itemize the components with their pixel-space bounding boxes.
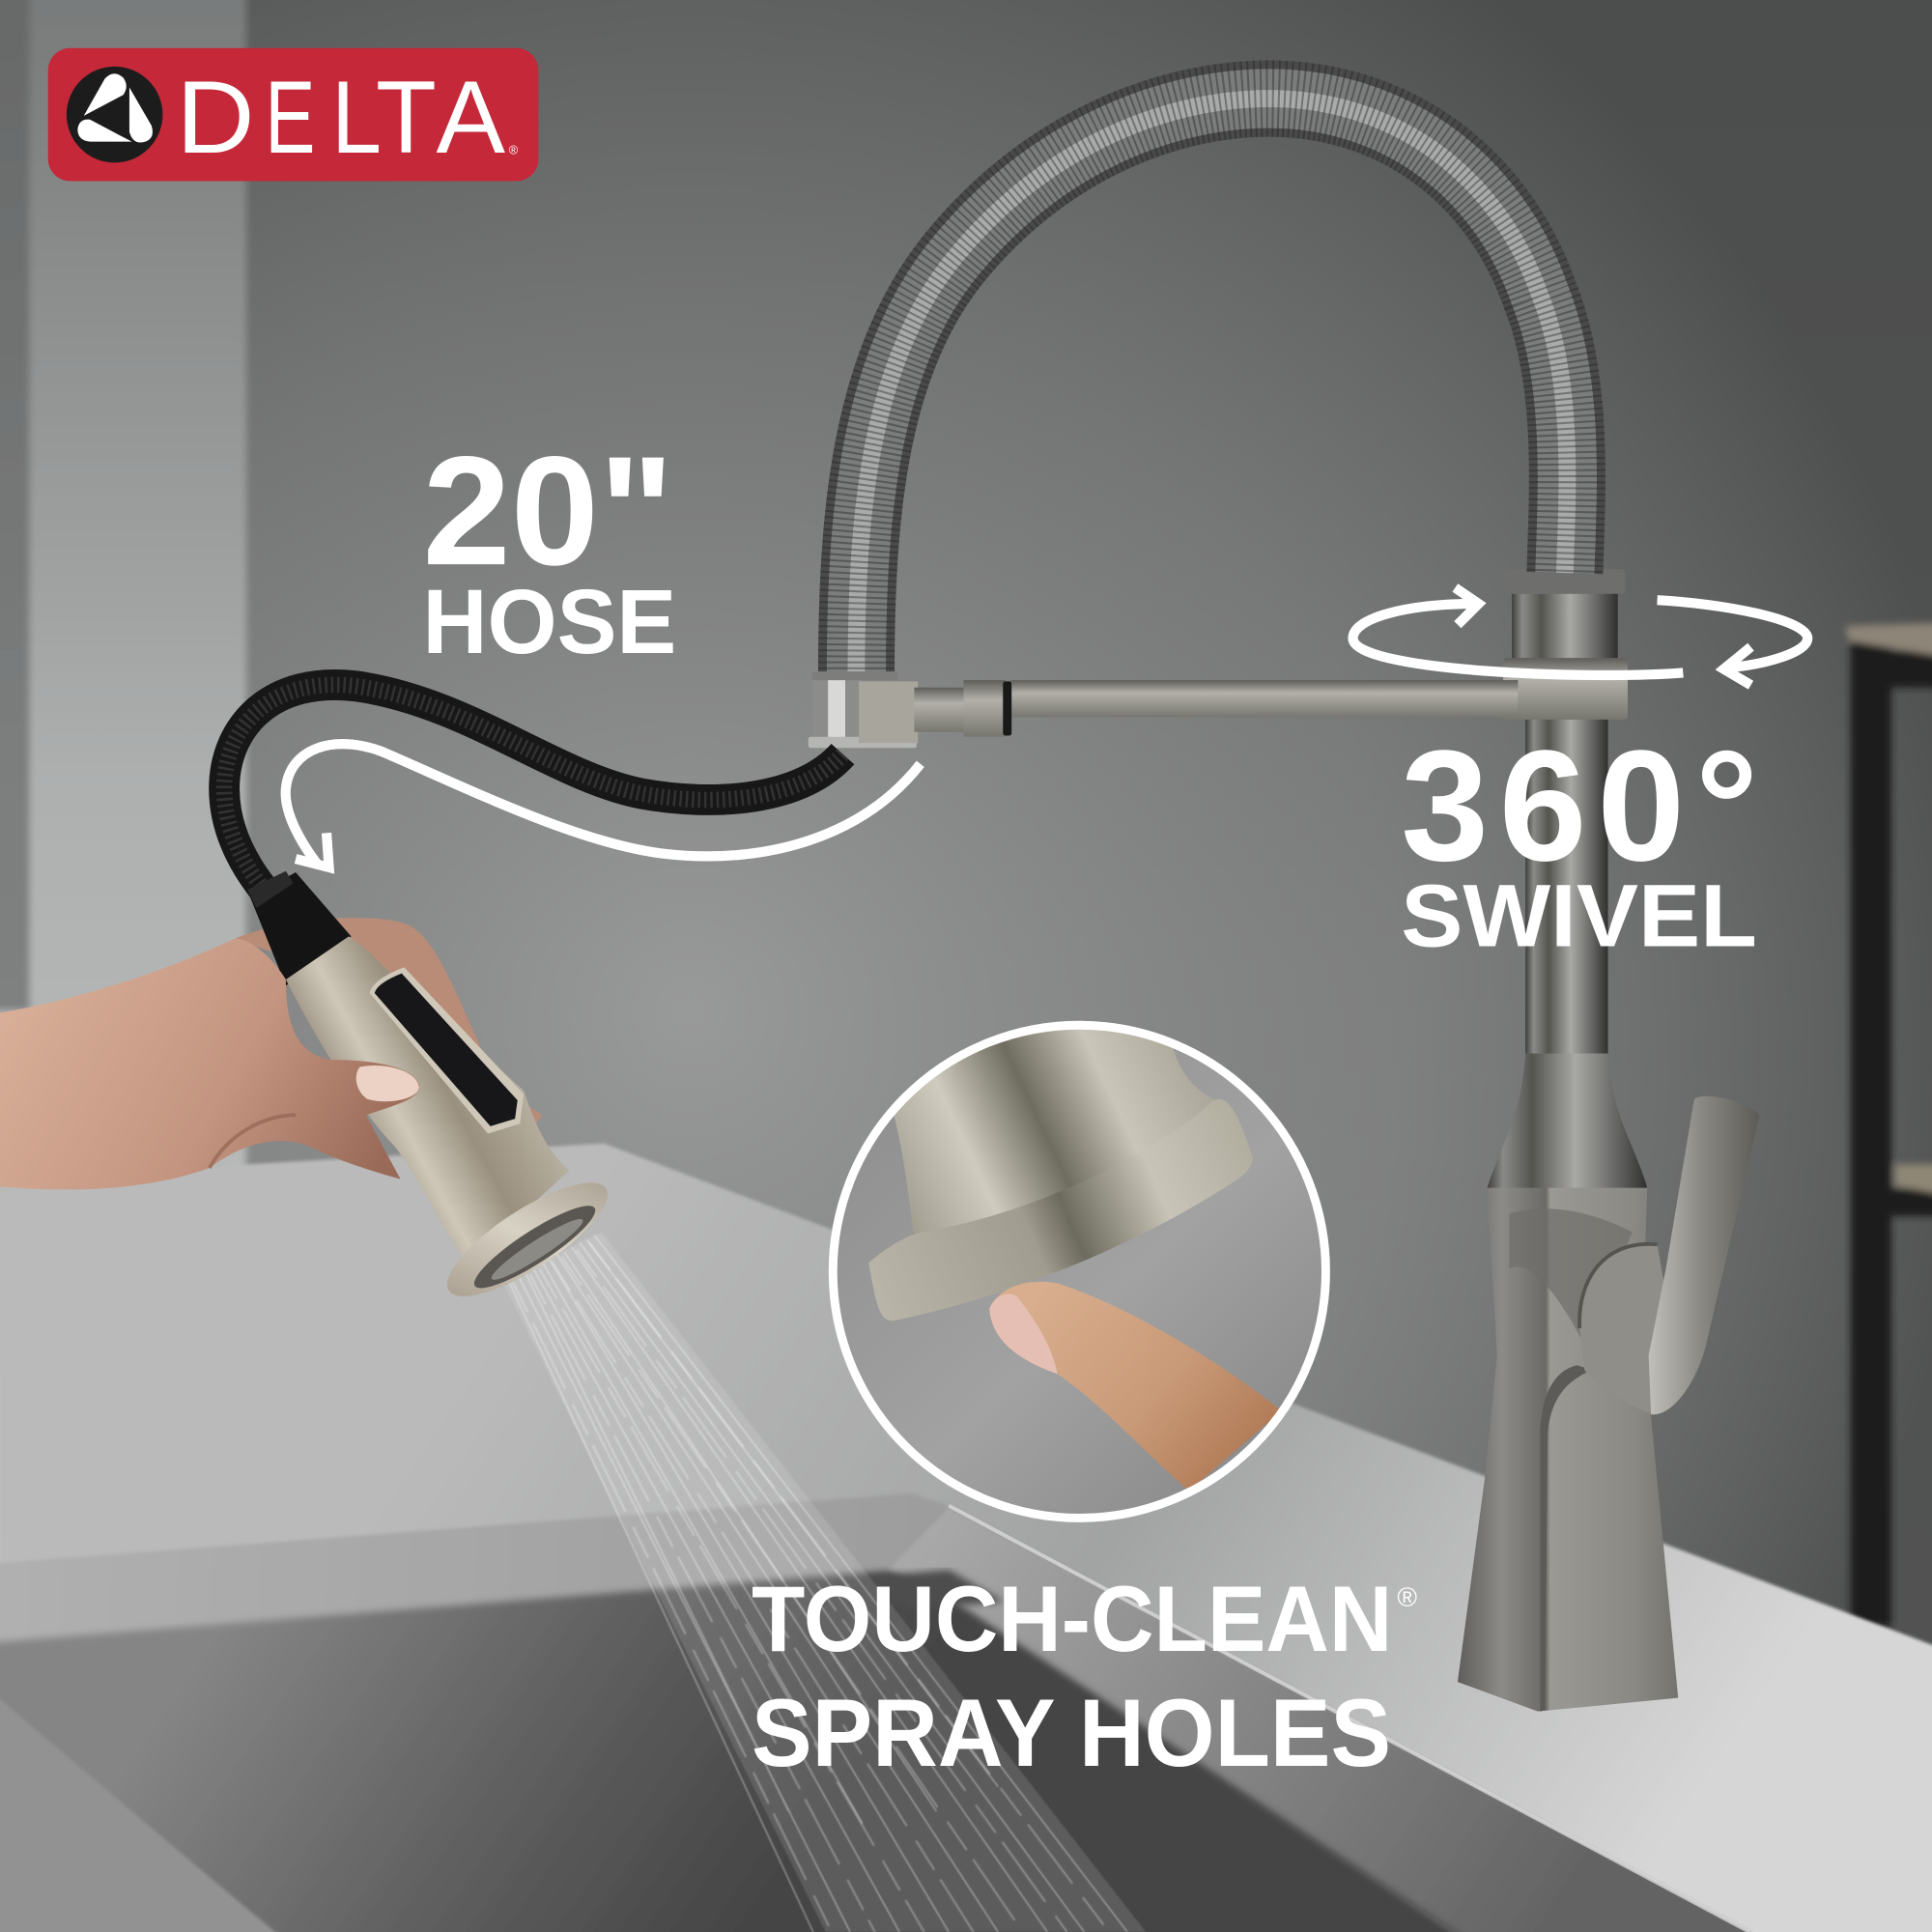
sprayer flange and nozzle face <box>433 1164 622 1316</box>
faucet upright post <box>1525 717 1608 1054</box>
hand behind sprayer <box>234 918 542 1131</box>
sink edge highlight <box>949 1506 1749 1932</box>
sprayer connector <box>247 871 352 985</box>
magnified spray head neck <box>895 1030 1214 1235</box>
base arch shadow <box>1540 1365 1592 1712</box>
logo wordmark: L <box>331 60 382 176</box>
detail circle <box>833 985 1325 1518</box>
registered mark: ® <box>509 142 519 156</box>
sink rim <box>0 1493 1749 1932</box>
logo wordmark: E <box>265 59 315 175</box>
base neck <box>1488 1054 1647 1188</box>
arrow: swivel left <box>1353 587 1683 675</box>
near counter corner <box>0 1678 321 1932</box>
logo wordmark: D <box>176 61 255 176</box>
label: 360 degree swivel: SWIVEL <box>1401 867 1757 966</box>
thumbnail <box>356 1065 419 1101</box>
magnified spray head flange <box>868 1099 1253 1321</box>
base shoulder shade <box>1509 1208 1633 1343</box>
background: shelf at right <box>1846 622 1932 1627</box>
logo wordmark <box>176 59 506 176</box>
label: touch-clean spray holes <box>752 1566 1417 1787</box>
sprayer head body <box>286 936 569 1263</box>
sink basin <box>0 1571 1516 1932</box>
faucet bridge rod <box>1010 680 1518 717</box>
Delta logo badge <box>48 48 538 181</box>
thumb and palm <box>0 939 419 1189</box>
faucet handle <box>1579 1096 1759 1414</box>
logo mark <box>67 67 162 162</box>
label: touch-clean spray holes: TOUCH-CLEAN <box>752 1566 1392 1671</box>
faucet base <box>1458 1054 1678 1712</box>
sink inner wall <box>887 1508 1749 1932</box>
magnified fingernail <box>989 1293 1057 1374</box>
faucet swivel collar <box>1503 569 1628 720</box>
label: 20 inch hose <box>423 425 676 673</box>
spout connector <box>809 671 1011 748</box>
sink drain edge <box>863 1570 1005 1609</box>
logo wordmark: T <box>376 60 437 176</box>
background: left pillar <box>0 0 246 1602</box>
label: 20 inch hose: 20" <box>423 425 674 598</box>
label: 20 inch hose: HOSE <box>423 572 676 673</box>
countertop <box>0 1144 1932 1932</box>
arrow: hose path <box>286 744 921 867</box>
label: 360 degree swivel: 360° <box>1401 717 1758 894</box>
arrow: swivel right <box>1658 600 1807 685</box>
magnified finger <box>989 1282 1282 1491</box>
thumb crease <box>210 1115 296 1168</box>
braided pull-down hose <box>224 685 842 890</box>
water spray <box>502 1233 1146 1932</box>
coil spring spout <box>856 99 1567 675</box>
logo wordmark: A <box>437 59 506 175</box>
label: touch-clean spray holes: SPRAY HOLES <box>752 1680 1391 1787</box>
sprayer button <box>370 967 524 1133</box>
label: touch-clean spray holes: ® <box>1397 1582 1417 1612</box>
